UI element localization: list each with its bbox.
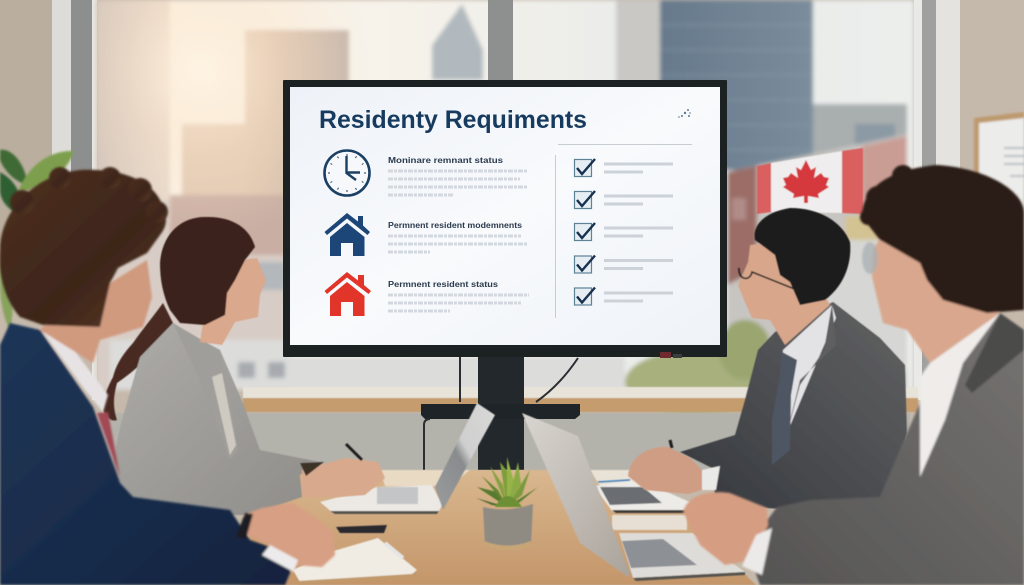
hair — [0, 167, 168, 327]
hands — [243, 503, 335, 567]
check item 1 — [574, 159, 673, 176]
icon: maple leaf — [783, 160, 829, 203]
neck and face — [872, 238, 1000, 363]
screen — [290, 87, 720, 345]
check item 5 — [574, 288, 673, 305]
icon: clock — [324, 150, 370, 196]
face and neck — [200, 258, 266, 345]
icon: blue house — [324, 213, 370, 256]
window mullion — [488, 0, 513, 82]
ponytail — [103, 303, 173, 421]
shirt — [212, 373, 236, 455]
person: man in grey suit right — [628, 208, 907, 515]
requirement 1 text: Moninare remnant status — [388, 155, 503, 165]
check item 3 — [574, 223, 673, 240]
wall notice board — [974, 112, 1024, 240]
lapel — [784, 304, 836, 445]
check item 4 — [574, 256, 673, 273]
person: front left man in navy suit — [0, 167, 335, 585]
monitor — [283, 80, 727, 358]
canadian flag — [757, 148, 863, 214]
requirement 2 text — [388, 220, 527, 252]
shirt — [920, 313, 1000, 477]
suit — [0, 323, 293, 585]
tie — [97, 412, 120, 477]
left plant — [0, 150, 74, 330]
laptop: centre left — [320, 403, 495, 514]
neck and face — [40, 260, 152, 363]
plant in pot — [476, 457, 538, 550]
checklist — [574, 159, 673, 305]
requirement 3 text — [388, 279, 529, 311]
window view: city skyline — [96, 0, 914, 414]
hair — [755, 208, 850, 305]
shirt collar — [40, 328, 108, 412]
hands — [683, 492, 768, 565]
person: front right man in grey suit — [683, 165, 1024, 585]
slide title: Residenty Requiments — [319, 106, 587, 134]
requirement 1 text — [388, 155, 527, 195]
tie — [772, 352, 797, 465]
jacket — [680, 302, 907, 515]
table — [240, 470, 756, 585]
requirement 2 text: Permnent resident modemnents — [388, 220, 522, 230]
glasses — [862, 242, 878, 274]
forearm and hand — [302, 458, 385, 497]
jacket — [750, 313, 1024, 585]
neck and face — [738, 240, 830, 345]
icon: red house — [324, 272, 371, 316]
hair — [160, 217, 255, 325]
requirement 3 text: Permnent resident status — [388, 279, 498, 289]
check item 2 — [574, 191, 673, 208]
person: woman in grey blazer — [103, 217, 385, 515]
clipboard and phone — [293, 525, 417, 585]
laptop: back right — [594, 480, 692, 530]
lapel — [965, 313, 1024, 393]
hair — [860, 165, 1024, 313]
shirt — [782, 305, 836, 445]
window sill — [100, 387, 918, 483]
blazer — [110, 323, 320, 515]
monitor stand — [421, 355, 580, 470]
hands — [628, 447, 702, 494]
glasses — [739, 268, 797, 290]
icon: decorative corner mark — [678, 109, 691, 118]
laptop: front — [522, 413, 745, 581]
